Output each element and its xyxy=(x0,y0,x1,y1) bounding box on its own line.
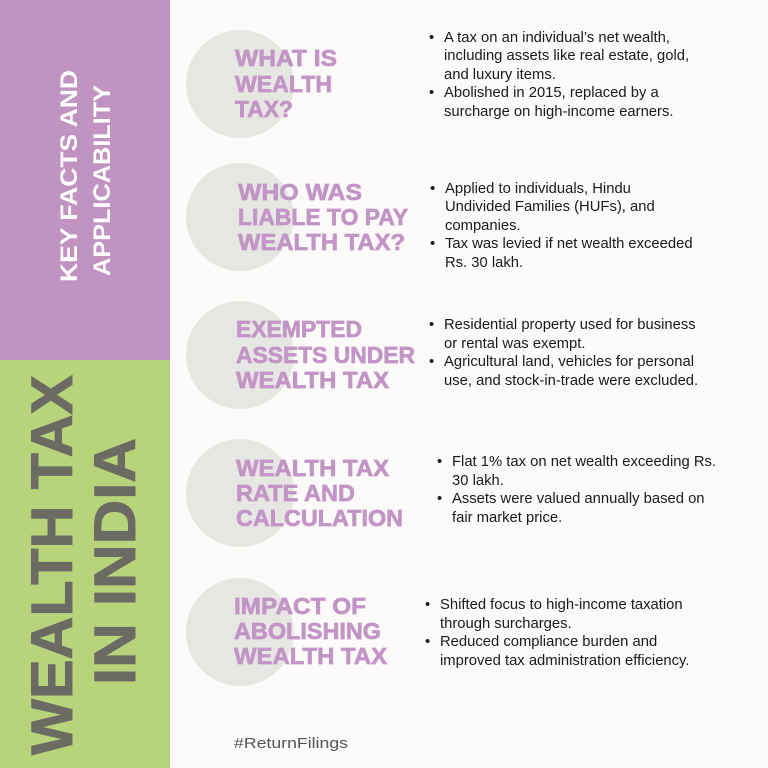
heading 3: EXEMPTED xyxy=(236,316,362,342)
bullets 2: Applied to individuals, Hindu xyxy=(445,181,631,197)
bullets 1: surcharge on high-income earners. xyxy=(444,104,673,120)
bullets 3: Residential property used for business xyxy=(444,317,696,333)
heading 5: IMPACT OF xyxy=(234,593,366,619)
heading 4 xyxy=(236,455,403,531)
icon: circle 5 xyxy=(186,578,294,686)
heading 2: LIABLE TO PAY xyxy=(238,204,408,230)
bullets 2: Undivided Families (HUFs), and xyxy=(445,199,655,215)
bullets 1: A tax on an individual’s net wealth, xyxy=(444,30,670,46)
bullets 1: including assets like real estate, gold, xyxy=(444,48,689,64)
bullets 2: Rs. 30 lakh. xyxy=(445,255,523,271)
icon: circle 1 xyxy=(186,30,294,138)
heading 2: WHO WAS xyxy=(238,179,362,205)
bullets 3: • xyxy=(429,317,434,333)
section 2: who was liable xyxy=(186,163,693,271)
panel: key facts sidebar xyxy=(0,0,170,360)
bullets 2: companies. xyxy=(445,218,521,234)
bullets 5: Shifted focus to high-income taxation xyxy=(440,597,683,613)
heading 1 xyxy=(235,45,337,122)
heading 2 xyxy=(238,179,408,255)
sidebar heading: key facts and applicability: KEY FACTS AND xyxy=(56,70,83,282)
icon: circle 4 xyxy=(186,439,294,547)
bullets 5: • xyxy=(425,634,430,650)
bullets 4: • xyxy=(437,454,442,470)
icon: circle 2 xyxy=(186,163,294,271)
bullets 3 xyxy=(429,317,698,389)
heading 4: WEALTH TAX xyxy=(236,455,389,481)
heading 3: WEALTH TAX xyxy=(236,367,389,393)
bullets 4 xyxy=(437,454,716,526)
bullets 4: Flat 1% tax on net wealth exceeding Rs. xyxy=(452,454,716,470)
sidebar heading: key facts and applicability: APPLICABILITY xyxy=(89,85,116,276)
heading 4: CALCULATION xyxy=(236,505,403,531)
panel: title sidebar xyxy=(0,360,170,768)
bullets 1 xyxy=(429,30,689,120)
bullets 5: • xyxy=(425,597,430,613)
bullets 5 xyxy=(425,597,689,669)
bullets 2: • xyxy=(430,181,435,197)
bullets 1: Abolished in 2015, replaced by a xyxy=(444,85,659,101)
bullets 5: Reduced compliance burden and xyxy=(440,634,657,650)
heading 2: WEALTH TAX? xyxy=(238,229,405,255)
bullets 1: and luxury items. xyxy=(444,67,556,83)
bullets 4: 30 lakh. xyxy=(452,473,504,489)
bullets 1: • xyxy=(429,85,434,101)
heading 3 xyxy=(236,316,415,393)
bullets 2 xyxy=(430,181,693,271)
heading 1: TAX? xyxy=(235,96,293,122)
bullets 3: Agricultural land, vehicles for personal xyxy=(444,354,694,370)
bullets 5: improved tax administration efficiency. xyxy=(440,653,689,669)
icon: circle 3 xyxy=(186,301,294,409)
section 5: impact of abolishing xyxy=(186,578,689,686)
bullets 4: • xyxy=(437,491,442,507)
title: wealth tax in india: WEALTH TAX xyxy=(20,375,85,755)
bullets 4: fair market price. xyxy=(452,510,562,526)
bullets 3: • xyxy=(429,354,434,370)
bullets 4: Assets were valued annually based on xyxy=(452,491,705,507)
bullets 1: • xyxy=(429,30,434,46)
bullets 2: • xyxy=(430,236,435,252)
bullets 3: use, and stock-in-trade were excluded. xyxy=(444,373,698,389)
bullets 2: Tax was levied if net wealth exceeded xyxy=(445,236,693,252)
title: wealth tax in india: IN INDIA xyxy=(83,438,148,685)
heading 1: WHAT IS xyxy=(235,45,337,71)
section 3: exempted assets xyxy=(186,301,698,409)
footer hashtag: #ReturnFilings xyxy=(234,735,348,752)
heading 3: ASSETS UNDER xyxy=(236,342,415,368)
heading 5: WEALTH TAX xyxy=(234,643,387,669)
heading 5: ABOLISHING xyxy=(234,618,381,644)
heading 1: WEALTH xyxy=(235,71,332,97)
sidebar heading: key facts and applicability xyxy=(56,70,116,282)
title: wealth tax in india xyxy=(20,375,148,755)
section 4: rate and calculation xyxy=(186,439,716,547)
heading 4: RATE AND xyxy=(236,480,355,506)
bullets 3: or rental was exempt. xyxy=(444,336,585,352)
section 1: what is wealth tax xyxy=(186,30,689,138)
bullets 5: through surcharges. xyxy=(440,616,572,632)
heading 5 xyxy=(234,593,387,669)
